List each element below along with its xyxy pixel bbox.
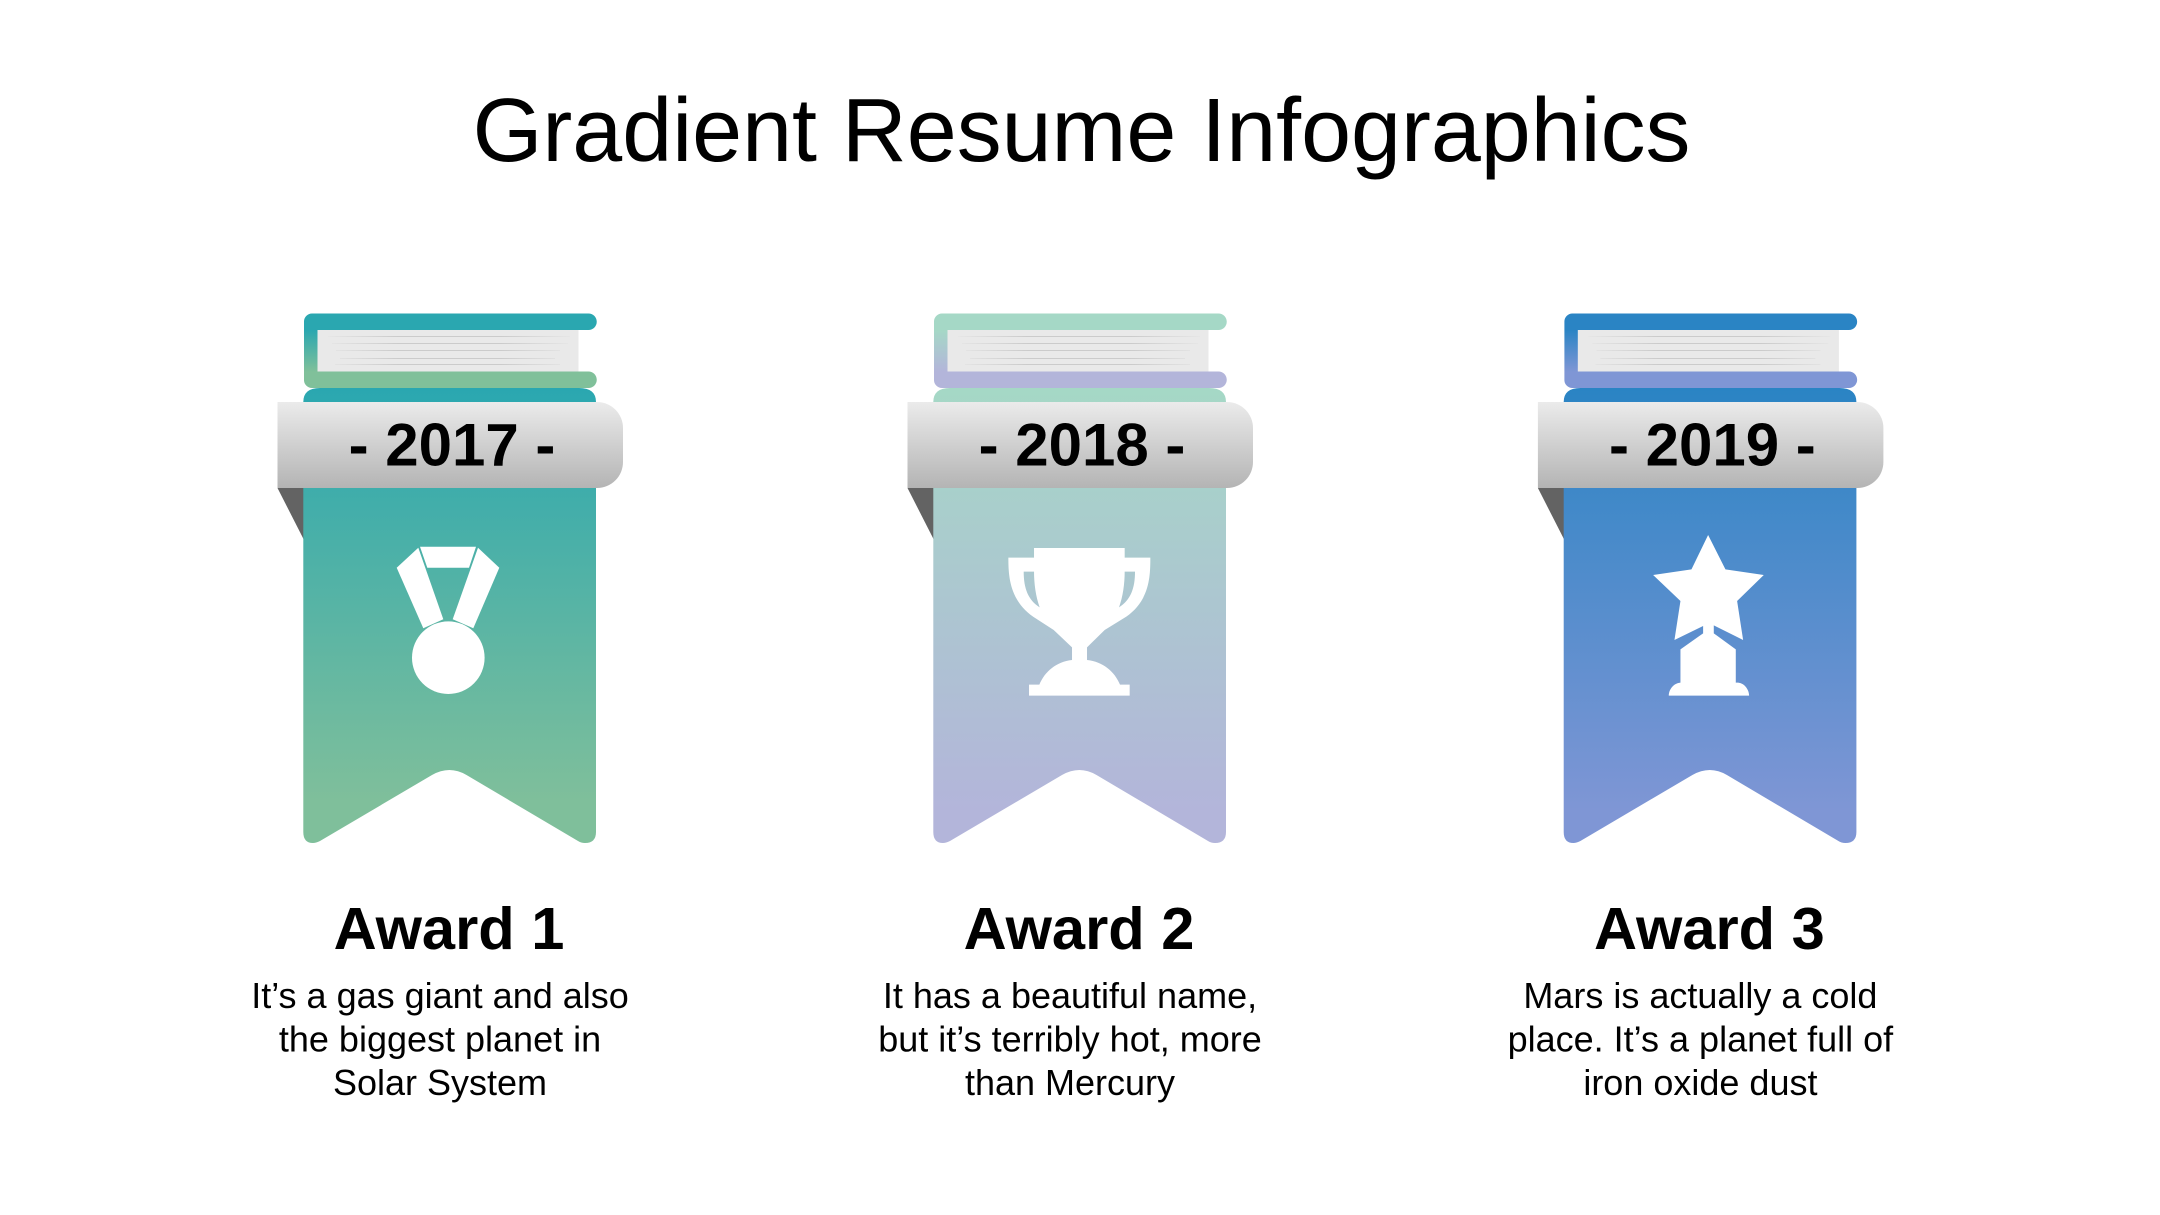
description: Solar System bbox=[333, 1062, 547, 1103]
panel: award 1 bbox=[251, 314, 629, 1103]
description: Mars is actually a cold bbox=[1523, 975, 1877, 1016]
icon: book bbox=[1564, 314, 1857, 388]
icon: book bbox=[304, 314, 597, 388]
icon: star trophy bbox=[1653, 535, 1764, 696]
description: iron oxide dust bbox=[1583, 1062, 1817, 1103]
year band bbox=[1538, 402, 1883, 488]
award heading: Award 3 bbox=[1594, 895, 1825, 962]
description: the biggest planet in bbox=[279, 1018, 601, 1060]
description: It has a beautiful name, bbox=[883, 975, 1257, 1016]
description: It’s a gas giant and also bbox=[251, 975, 629, 1016]
year band bbox=[908, 402, 1253, 488]
ribbon bbox=[933, 388, 1226, 843]
award heading: Award 1 bbox=[334, 895, 564, 962]
ribbon bbox=[303, 388, 596, 843]
year band bbox=[278, 402, 623, 488]
panel: award 3 bbox=[1508, 314, 1894, 1103]
description: than Mercury bbox=[965, 1062, 1175, 1103]
description: but it’s terribly hot, more bbox=[878, 1018, 1262, 1060]
award heading: Award 2 bbox=[964, 895, 1194, 962]
year band: - 2017 - bbox=[349, 412, 555, 478]
year band: - 2019 - bbox=[1609, 412, 1816, 478]
year band: - 2018 - bbox=[979, 412, 1185, 478]
icon: fold shadow bbox=[278, 488, 304, 540]
icon: book bbox=[934, 314, 1227, 388]
ribbon bbox=[1564, 388, 1856, 843]
icon: fold shadow bbox=[908, 488, 934, 540]
icon: fold shadow bbox=[1538, 488, 1564, 540]
icon: medal bbox=[397, 547, 499, 694]
title: Gradient Resume Infographics bbox=[473, 81, 1690, 181]
icon: trophy bbox=[1008, 548, 1150, 696]
panel: award 2 bbox=[878, 314, 1262, 1103]
description: place. It’s a planet full of bbox=[1508, 1018, 1894, 1060]
